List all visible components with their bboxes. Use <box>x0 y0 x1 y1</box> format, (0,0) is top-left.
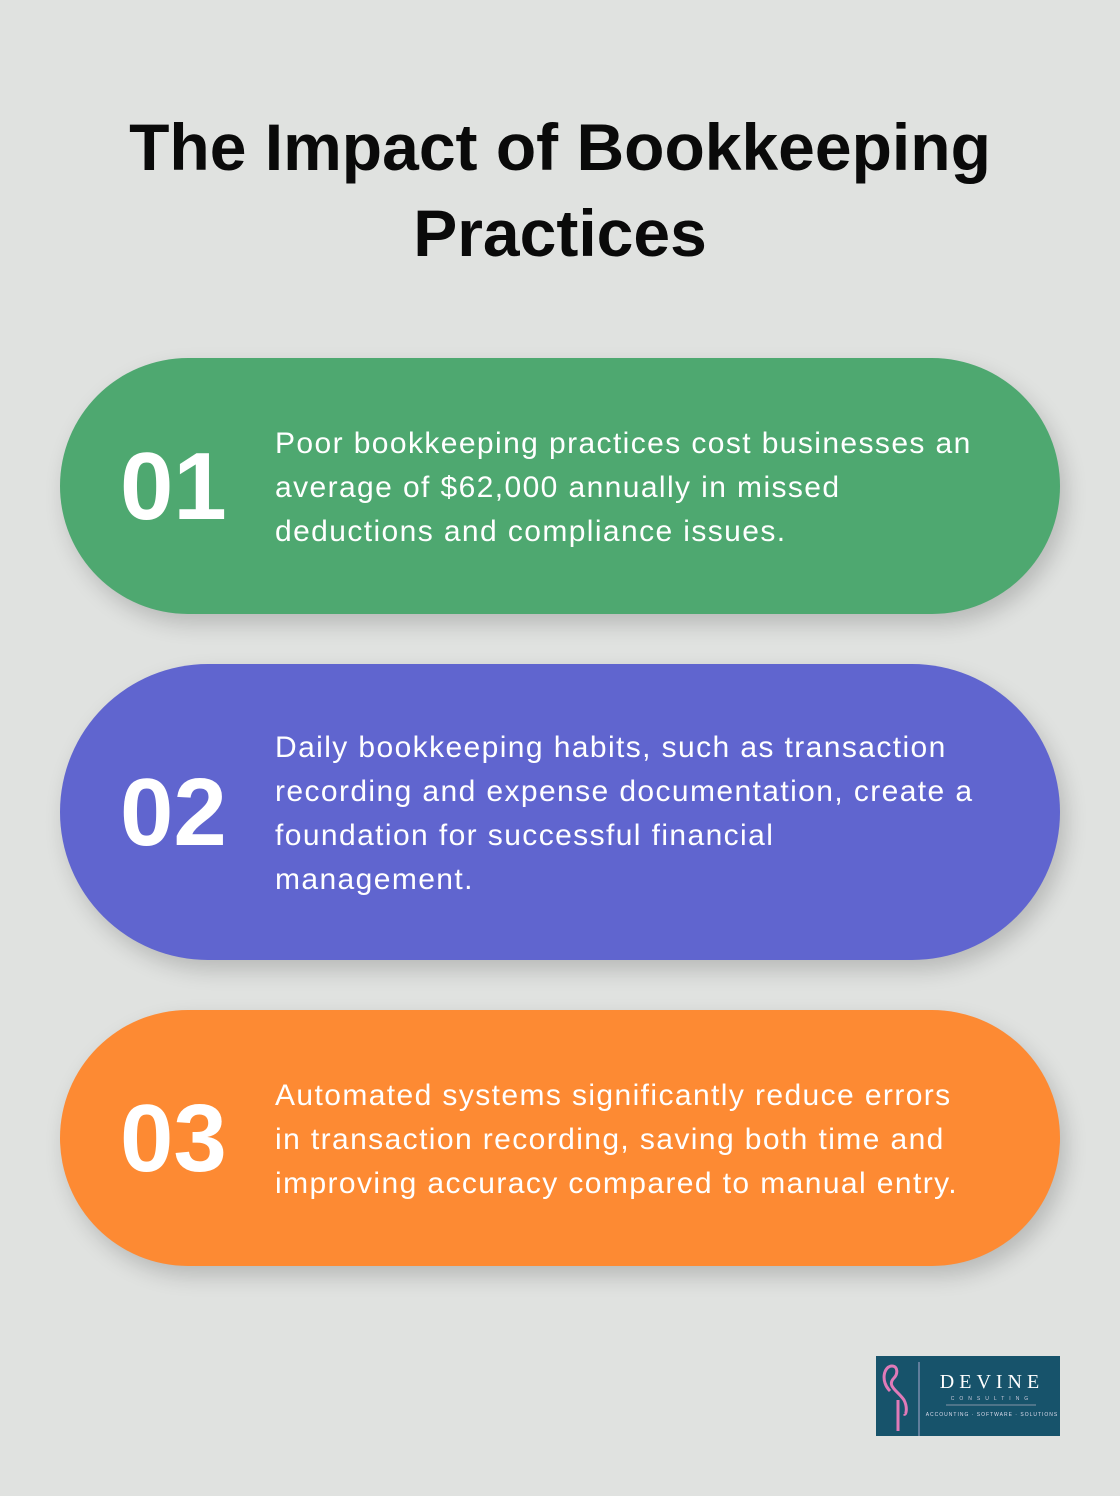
text 03: Automated systems significantly reduce errors <box>275 1079 952 1112</box>
text 02: management. <box>275 863 474 896</box>
text 01 <box>275 427 972 548</box>
panel: 03 <box>60 1010 1060 1266</box>
text 01: Poor bookkeeping practices cost businesses an <box>275 427 972 460</box>
logo <box>876 1356 1060 1436</box>
text 01: average of $62,000 annually in missed <box>275 471 840 504</box>
text 02: Daily bookkeeping habits, such as transaction <box>275 731 947 764</box>
text 01: deductions and compliance issues. <box>275 515 786 548</box>
title: The Impact of Bookkeeping <box>129 110 991 184</box>
number 01: 01 <box>120 433 227 540</box>
logo: DEVINE <box>940 1371 1044 1393</box>
logo: CONSULTING <box>951 1396 1033 1402</box>
text 03: in transaction recording, saving both time and <box>275 1123 945 1156</box>
text 02: recording and expense documentation, create a <box>275 775 973 808</box>
text 02 <box>275 731 973 896</box>
text 03: improving accuracy compared to manual entry. <box>275 1167 958 1200</box>
title: Practices <box>413 196 707 270</box>
number 02: 02 <box>120 759 227 866</box>
logo: ACCOUNTING · SOFTWARE · SOLUTIONS <box>926 1412 1058 1418</box>
number 03: 03 <box>120 1085 227 1192</box>
title <box>129 110 991 270</box>
text 02: foundation for successful financial <box>275 819 774 852</box>
text 03 <box>275 1079 958 1200</box>
panel: 02 <box>60 664 1060 960</box>
panel: 01 <box>60 358 1060 614</box>
